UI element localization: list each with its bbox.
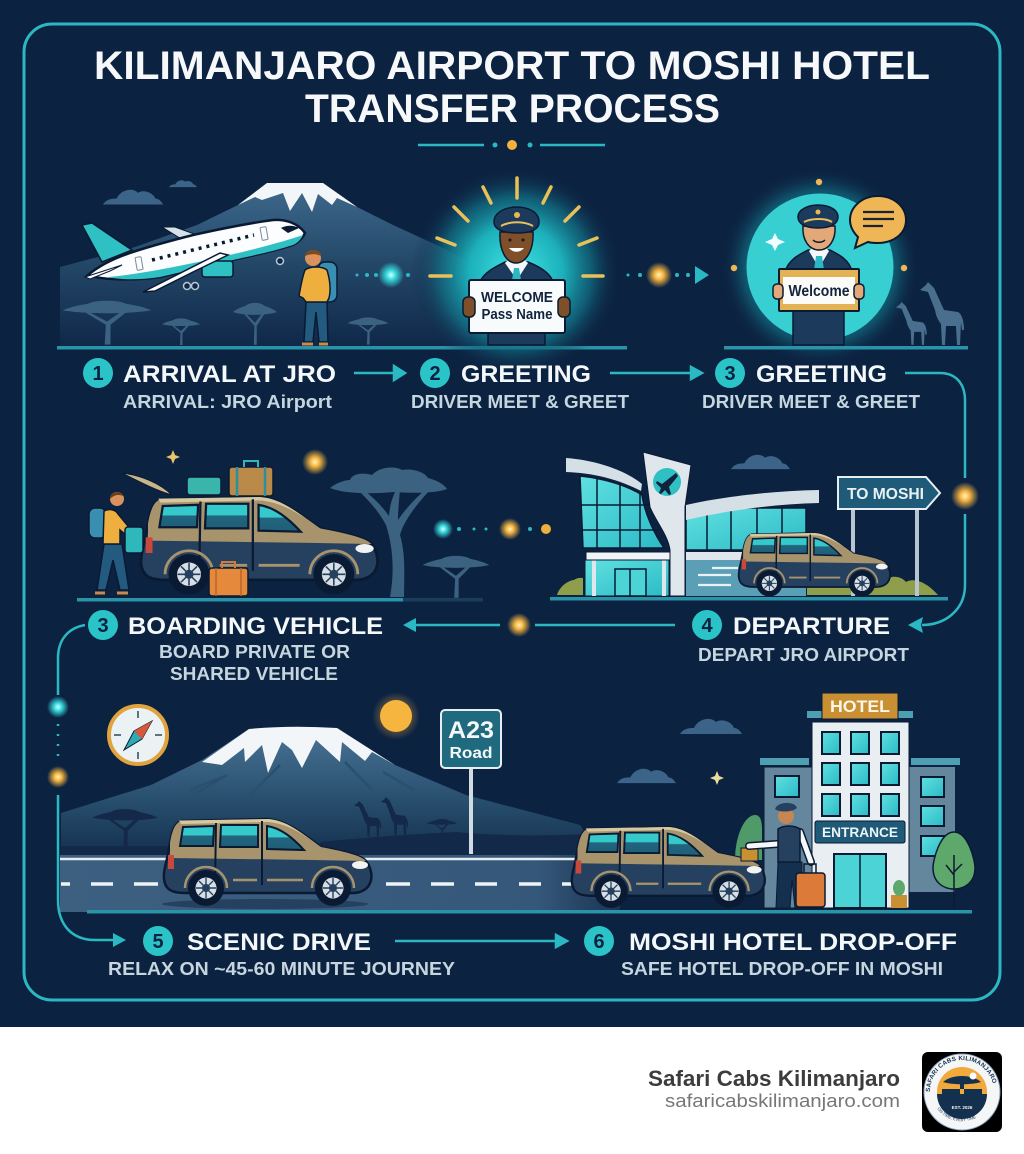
sun rays <box>430 178 603 276</box>
car shadow <box>162 899 368 909</box>
step 3 boarding label: BOARDING VEHICLE <box>128 613 383 640</box>
hotel building <box>760 693 960 908</box>
ground line <box>87 910 972 914</box>
step 6 label: MOSHI HOTEL DROP-OFF <box>629 929 957 956</box>
step 3 boarding label: BOARD PRIVATE OR <box>159 642 350 662</box>
ground line <box>77 598 483 602</box>
step 3 label <box>702 358 920 412</box>
welcome sign <box>463 280 570 333</box>
acacia trees <box>63 301 389 345</box>
orange suitcase <box>209 562 248 596</box>
step 3 boarding label: SHARED VEHICLE <box>170 664 338 684</box>
departing car <box>739 533 890 597</box>
footer brand text: safaricabskilimanjaro.com <box>665 1091 900 1111</box>
step 6 label <box>584 926 957 979</box>
sun <box>372 692 420 740</box>
title: TRANSFER PROCESS <box>305 87 720 131</box>
compass <box>109 706 167 764</box>
driver figure <box>785 205 852 345</box>
big acacia tree <box>330 467 489 598</box>
giraffes <box>896 282 964 345</box>
step 5 label: SCENIC DRIVE <box>187 929 371 956</box>
sparkles <box>731 179 907 271</box>
footer logo <box>922 1052 1002 1132</box>
step 2 label: DRIVER MEET & GREET <box>411 392 629 412</box>
welcome sign: WELCOME <box>481 289 553 306</box>
arrow 4 to 3 with gold light <box>403 613 675 637</box>
title ornament <box>418 140 605 150</box>
step 4 label <box>692 610 909 665</box>
driver figure <box>480 207 553 345</box>
scene: scenic drive and hotel <box>60 692 975 914</box>
scene 3: greeting driver with speech bubble <box>720 167 968 367</box>
footer logo: ON-TIME, EVERY TIME <box>938 1108 976 1122</box>
step 4 label: DEPARTURE <box>733 613 890 640</box>
road <box>60 855 620 912</box>
step 5 label: RELAX ON ~45-60 MINUTE JOURNEY <box>108 959 455 979</box>
arriving car <box>572 827 765 908</box>
hotel building: ENTRANCE <box>822 824 898 840</box>
title: KILIMANJARO AIRPORT TO MOSHI HOTEL <box>94 44 930 88</box>
connector: dots 1 <box>356 262 410 288</box>
speech bubble <box>850 196 906 248</box>
step 3 label: GREETING <box>756 361 887 388</box>
connector: dots between scenes <box>433 518 551 540</box>
car on road <box>164 819 371 906</box>
To Moshi road sign: TO MOSHI <box>847 486 924 503</box>
luggage on roof <box>187 461 273 496</box>
traveller loading bag <box>89 492 143 593</box>
welcome sign: Pass Name <box>482 306 552 323</box>
traveller with backpack <box>299 250 337 344</box>
step 3 boarding label <box>88 610 383 684</box>
step 1 label: ARRIVAL: JRO Airport <box>123 392 332 412</box>
savanna silhouettes <box>92 797 457 849</box>
step 3 boarding label: 3 <box>97 615 109 637</box>
footer logo: EST. 2026 <box>952 1105 973 1110</box>
scene 2: greeting driver <box>411 167 621 377</box>
welcome sign: Welcome <box>788 283 850 300</box>
mountain <box>61 727 600 855</box>
A23 road sign <box>441 710 501 854</box>
van <box>141 497 378 594</box>
welcome sign <box>773 269 864 311</box>
open hatch <box>122 473 172 495</box>
step 2 label: GREETING <box>461 361 591 388</box>
footer logo: SAFARI CABS KILIMANJARO <box>926 1056 996 1092</box>
dark foothills <box>61 832 590 855</box>
step 5 label <box>108 926 455 979</box>
teal circle glow <box>720 167 920 367</box>
connector: dots 2 with arrowhead <box>626 262 709 288</box>
title <box>94 44 930 131</box>
A23 road sign: A23 <box>448 717 494 744</box>
step 3 label: DRIVER MEET & GREET <box>702 392 920 412</box>
step 2 label <box>411 358 629 412</box>
right side connector with arrow <box>905 373 979 633</box>
clouds <box>103 180 197 204</box>
arrow 2 to 3 <box>610 367 702 379</box>
footer brand text <box>648 1066 900 1111</box>
step 4 label: 4 <box>701 615 713 637</box>
step 1 label: ARRIVAL AT JRO <box>123 361 336 388</box>
sparkle and gold light <box>166 449 328 475</box>
scene: boarding vehicle <box>77 449 489 602</box>
ground line <box>550 597 948 600</box>
step 6 label: SAFE HOTEL DROP-OFF IN MOSHI <box>621 959 943 979</box>
airport building <box>566 452 819 596</box>
step 3 label: 3 <box>724 363 736 385</box>
step 4 label: DEPART JRO AIRPORT <box>698 645 909 665</box>
arrow 5 to 6 <box>395 935 567 947</box>
ground line 1 <box>57 346 627 350</box>
step 2 label: 2 <box>429 363 441 385</box>
A23 road sign: Road <box>450 745 492 762</box>
To Moshi road sign <box>838 477 940 596</box>
bushes <box>557 577 938 595</box>
step 1 label <box>83 358 336 412</box>
green bush and tree <box>735 815 975 908</box>
step 1 label: 1 <box>92 363 104 385</box>
footer brand text: Safari Cabs Kilimanjaro <box>648 1066 900 1091</box>
hotel porter with luggage <box>741 803 825 908</box>
scene: airport departure <box>550 452 948 600</box>
step 5 label: 5 <box>152 931 164 953</box>
cloud <box>731 455 790 469</box>
airplane <box>82 220 305 292</box>
teal glow <box>411 167 621 377</box>
left side connector with arrow <box>47 625 126 947</box>
scene 1: arrival at JRO <box>57 180 627 350</box>
hotel building: HOTEL <box>830 697 890 716</box>
mountain <box>60 183 470 346</box>
clouds and star <box>617 719 742 785</box>
step 6 label: 6 <box>593 931 605 953</box>
arrow 1 to 2 <box>354 366 405 380</box>
ground line 3 <box>724 346 968 350</box>
